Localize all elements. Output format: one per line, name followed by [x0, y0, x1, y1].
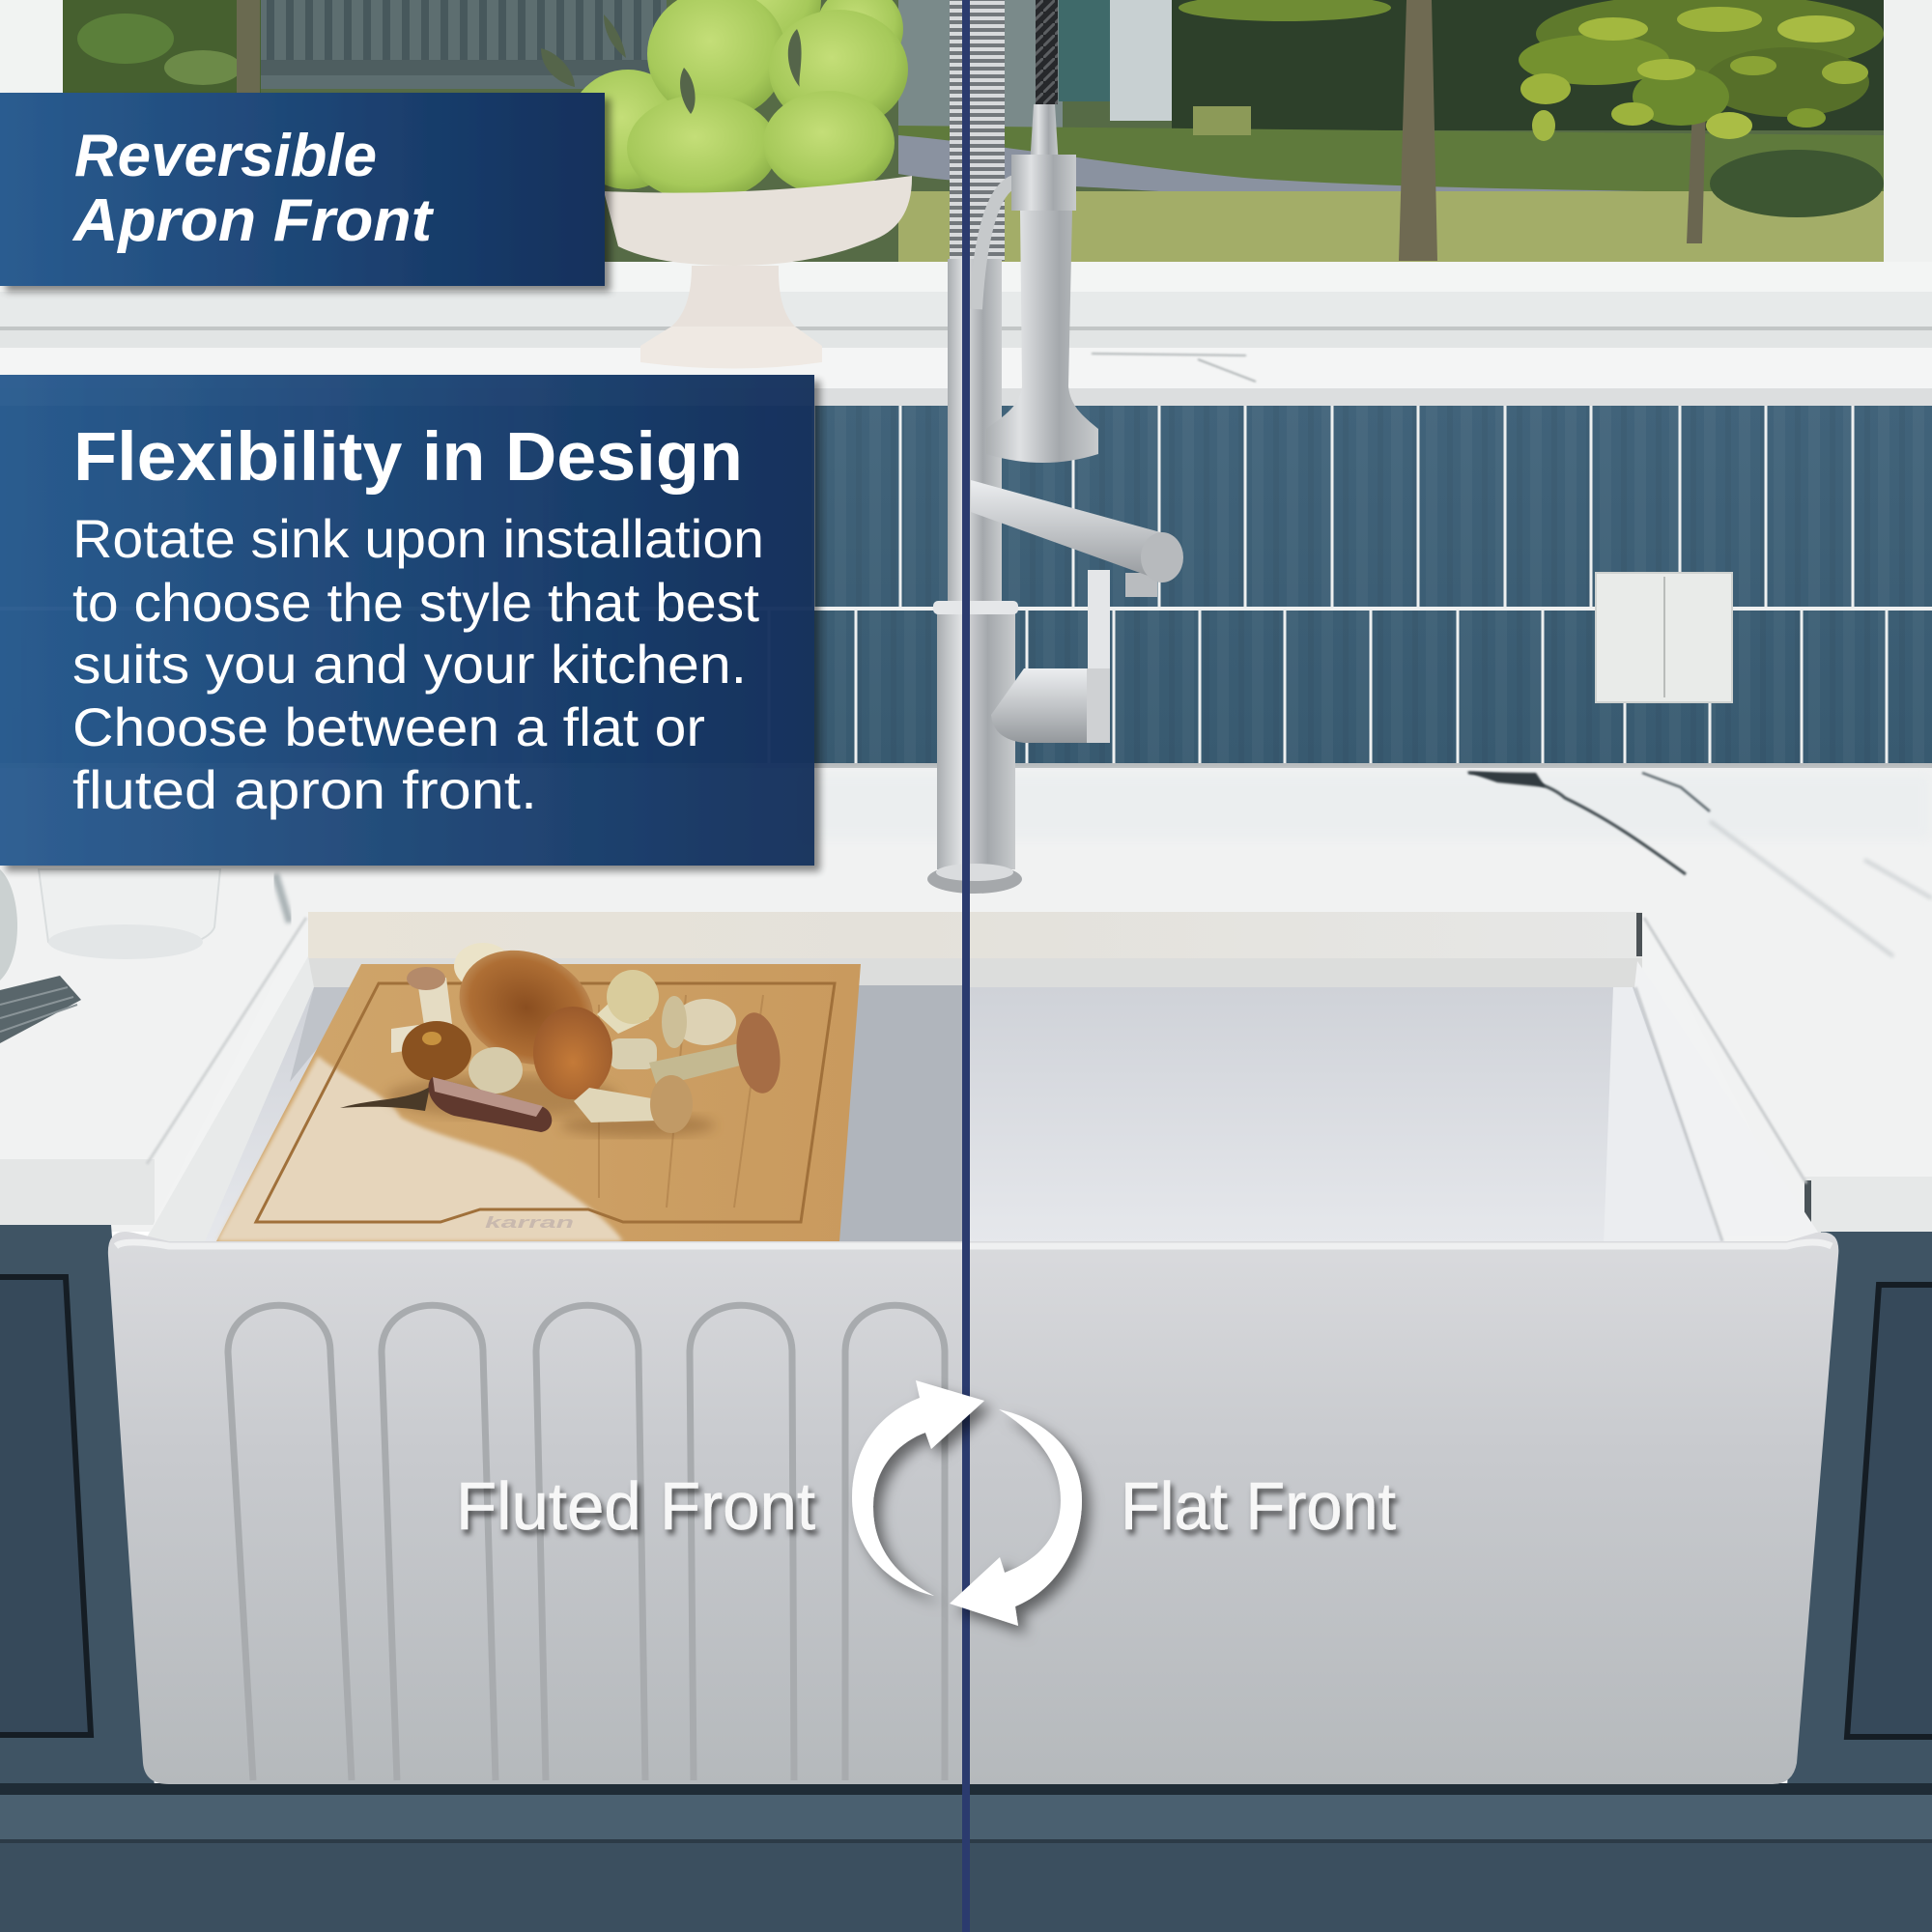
- arrow: up-right: [852, 1380, 984, 1596]
- heading lines: Reversible: [74, 123, 377, 189]
- marble countertop: [0, 768, 1932, 1233]
- upper pipe with hook: [948, 182, 1014, 609]
- body text: Rotate sink upon installation: [72, 508, 764, 569]
- mushrooms: [386, 929, 785, 1137]
- divider line between fluted and flat: [962, 0, 970, 1932]
- black braided hose: [1036, 0, 1058, 104]
- panel: reversible apron front: [0, 93, 605, 286]
- brand mark on board: karran: [485, 1213, 574, 1232]
- faucet handle: [991, 570, 1110, 743]
- label: flat front: Flat Front: [1121, 1468, 1396, 1544]
- body text: to choose the style that best: [72, 572, 759, 633]
- tree foliage: [1519, 0, 1884, 141]
- folded towel: [0, 976, 81, 1043]
- wall switch plate: [1596, 573, 1732, 702]
- body text: fluted apron front.: [72, 759, 537, 820]
- marble fruit bowl: [604, 176, 912, 369]
- marble window sill: [0, 348, 1932, 406]
- green apples in bowl: [541, 0, 912, 369]
- label: fluted front: Fluted Front: [456, 1468, 815, 1544]
- pull-down sprayer: [986, 104, 1098, 463]
- body text: [72, 508, 764, 820]
- heading lines: [71, 123, 434, 254]
- body text: suits you and your kitchen.: [72, 634, 747, 695]
- arrow: down-left: [950, 1409, 1082, 1626]
- apron front of sink: [108, 1232, 1838, 1784]
- body text: Choose between a flat or: [72, 696, 705, 757]
- faucet: [927, 0, 1183, 894]
- rotation arrows: [852, 1380, 1082, 1626]
- glass on counter: [0, 869, 220, 980]
- window frame: [0, 0, 1932, 352]
- panel: flexibility in design: [0, 375, 814, 866]
- chef knife: [340, 1077, 552, 1132]
- spout: [971, 480, 1183, 597]
- heading: Flexibility in Design: [73, 419, 743, 496]
- tile backsplash: [0, 406, 1932, 768]
- heading lines: Apron Front: [71, 187, 434, 254]
- cabinets and toe kick: [0, 1225, 1932, 1932]
- faucet base pipe: [927, 601, 1022, 894]
- spring coil: [950, 0, 1005, 261]
- cutting board with mushrooms: [216, 929, 861, 1241]
- sink basin: [145, 912, 1821, 1246]
- window view: garden outside: [0, 0, 1932, 270]
- fluted arches: [228, 1305, 945, 1780]
